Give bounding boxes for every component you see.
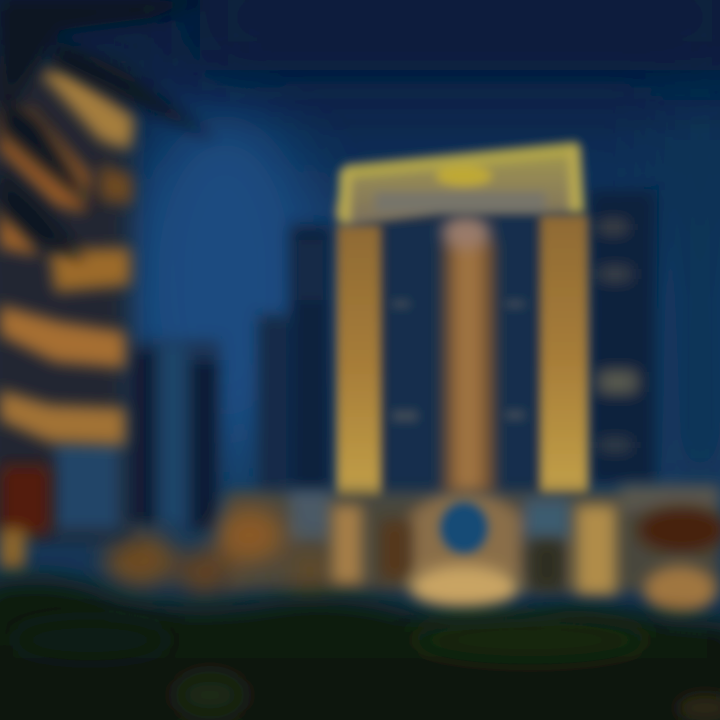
tower centre column [442,216,494,495]
entrance warm lights [104,507,332,596]
background tower: lower left [125,340,220,530]
foreground foliage [0,578,720,720]
tower right column [540,215,588,495]
left building balconies [0,60,134,570]
tower entrance podium [225,485,720,592]
main tower [335,142,588,500]
tower dark glass bays [340,205,585,495]
tower top arch [335,142,584,226]
background tower: right [588,190,656,485]
tower left column [337,225,381,500]
entrance blue arch [440,502,488,554]
window lights on bays [392,300,525,422]
palm fronds silhouette [0,0,215,260]
background tower: left of centre [258,225,332,495]
